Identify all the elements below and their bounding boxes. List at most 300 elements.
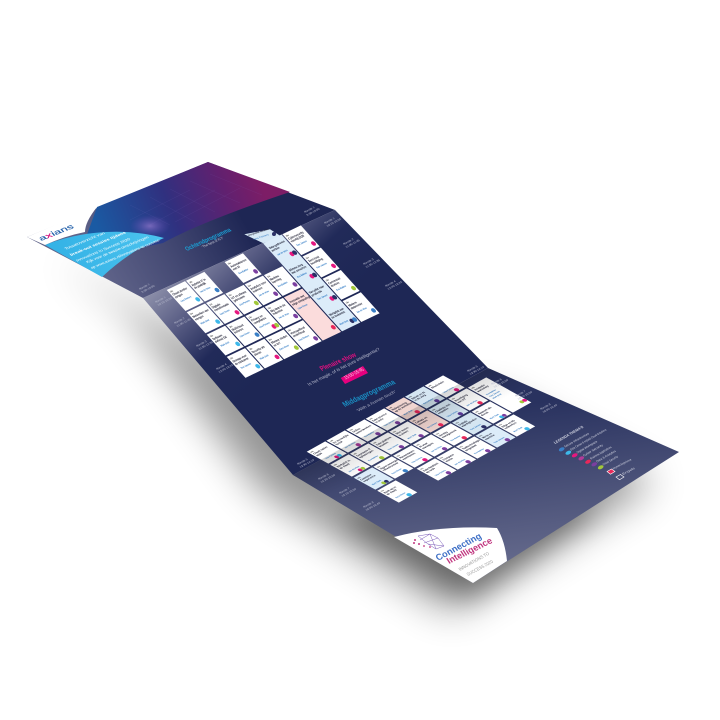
heading: middagprogramma: Middagprogramma bbox=[341, 378, 397, 408]
session r2 c6 bbox=[322, 270, 360, 300]
session r1 c4: Eva Bakker bbox=[278, 282, 289, 288]
session r0 c6 bbox=[282, 225, 320, 255]
row labels: middag left: Ronde 7 bbox=[338, 486, 351, 495]
session r2 c3 bbox=[265, 298, 302, 328]
session r3 c3: Lisa Peeters bbox=[298, 334, 311, 342]
session r1 c4: 15u bbox=[412, 419, 418, 422]
heading: ochtendprogramma: 'The best of ICT' bbox=[201, 236, 225, 249]
session r3 c2: 13u bbox=[268, 338, 273, 342]
session r2 c4: Eva Bakker bbox=[450, 435, 462, 442]
session column highlighted blue: Werkplek van bbox=[328, 307, 345, 317]
session r0 c5: Ethiek en AI bbox=[410, 391, 427, 400]
session r2 c5 bbox=[452, 412, 492, 435]
session r2 c0: Customer bbox=[359, 473, 374, 481]
row labels: ochtend left: Ronde 3 bbox=[195, 339, 208, 348]
session r2 c2: compliance bbox=[252, 316, 268, 325]
session r0 c2: 14u bbox=[349, 428, 355, 431]
row labels: ochtend left: 12:45-13:25 bbox=[218, 363, 234, 374]
session r2 c3: AI voor bbox=[418, 441, 430, 448]
row labels: ochtend right: Ronde 1 bbox=[323, 216, 336, 225]
session r1 c3: iedereen bbox=[251, 286, 264, 294]
session r3 c4: Taaltechnologie bbox=[461, 438, 482, 450]
session r0 c5: 14u bbox=[408, 395, 414, 398]
intro text bbox=[64, 231, 161, 270]
session column highlighted blue: Mark Smit bbox=[339, 319, 349, 326]
session r0 c1 bbox=[326, 430, 367, 453]
heading: ochtendprogramma bbox=[184, 227, 233, 252]
logo wordmark: SUCCESS 2020 bbox=[466, 559, 495, 578]
session r1 c1: Duurzame IT bbox=[355, 447, 372, 457]
session r2 c0: Mark Smit bbox=[371, 479, 382, 486]
session r1 c6 bbox=[448, 388, 488, 411]
session r1 c1: transformatie bbox=[213, 302, 230, 312]
session r1 c0: Jan de Vries bbox=[348, 465, 361, 473]
session r3 c0: 17u bbox=[381, 489, 386, 492]
session r3 c0: Tom Jansen bbox=[241, 363, 253, 370]
session r0 c4: op de werkvloer bbox=[393, 401, 415, 413]
session r2 c1: Hyperconverged bbox=[378, 458, 400, 470]
row labels: middag left: 13:30-14:10 bbox=[299, 458, 315, 469]
session r2 c0: Software bbox=[211, 333, 224, 341]
legend item: Data & Analytics bbox=[595, 449, 617, 463]
session column highlighted blue: Eva Bakker bbox=[297, 273, 308, 279]
session r1 c1: oplossingen bbox=[358, 449, 375, 459]
session r0 c2 bbox=[346, 419, 386, 442]
session r0 c1: de praktijk bbox=[193, 281, 207, 290]
session r2 c3: industrie bbox=[271, 308, 284, 316]
session r2 c6 bbox=[472, 401, 512, 424]
session r2 c6: Mark Smit bbox=[489, 413, 500, 420]
session r3 c4: toegepast bbox=[464, 444, 478, 452]
row labels: middag left: 14:20-15:00 bbox=[320, 473, 336, 484]
session r1 c6: van OT bbox=[456, 397, 467, 404]
session r1 c6: Zero trust bbox=[307, 255, 320, 263]
session r0 c0: 14u bbox=[309, 450, 315, 453]
session r3 c6: Modern bbox=[347, 300, 358, 308]
session r3 c2 bbox=[416, 458, 457, 481]
session r0 c3: met AI bbox=[231, 265, 241, 271]
logo wordmark bbox=[434, 531, 495, 578]
session r1 c1: 11u bbox=[209, 303, 214, 306]
session r2 c0 bbox=[354, 467, 394, 490]
session r2 c2: Privacy en bbox=[250, 314, 264, 323]
session r0 c6 bbox=[425, 375, 465, 398]
session r3 c0: de toekomst bbox=[234, 356, 250, 366]
session r0 c3: Automatiseren bbox=[229, 258, 248, 269]
session r1 c1 bbox=[350, 443, 390, 466]
session r1 c2: bouwen bbox=[377, 441, 390, 448]
row labels: middag left: Ronde 5 bbox=[296, 457, 309, 466]
legend item: Cloud Security bbox=[602, 455, 619, 466]
session r1 c6: 15u bbox=[452, 397, 457, 400]
row labels: ochtend left: 11:55-12:35 bbox=[198, 340, 214, 351]
session r0 c3: Tom Jansen bbox=[384, 420, 396, 427]
white logo corner bbox=[27, 207, 97, 245]
panel: top fold bbox=[27, 162, 335, 298]
schedule: ochtend sessies bbox=[167, 225, 380, 378]
session column highlighted blue: Slimme zorg bbox=[288, 263, 304, 272]
session r3 c2: Sara Visser bbox=[279, 345, 290, 351]
session r2 c6: 16u bbox=[475, 410, 480, 413]
session r3 c2: Lisa Peeters bbox=[434, 469, 448, 477]
row labels: ochtend right: Ronde 2 bbox=[342, 237, 355, 246]
session r2 c5: Digitale bbox=[457, 419, 469, 426]
session r0 c1: 10u bbox=[189, 281, 194, 284]
session r2 c1 bbox=[226, 316, 263, 346]
session r1 c1: Eva Bakker bbox=[367, 455, 380, 462]
session column highlighted blue bbox=[263, 235, 360, 331]
session r2 c6: Eva Bakker bbox=[336, 286, 347, 292]
session r3 c2 bbox=[265, 329, 302, 359]
session r1-r2 c7 bbox=[468, 377, 531, 413]
legend item: Data Center & Hybrid Cloud Solutions bbox=[569, 428, 608, 451]
row labels: ochtend left: Ronde 1 bbox=[138, 282, 151, 291]
session r0 c2: samenwerken bbox=[354, 424, 373, 435]
session r3 c6: Mark Smit bbox=[512, 426, 524, 433]
session r0 c2: Online bbox=[351, 427, 362, 433]
session r2 c1: Sara Visser bbox=[391, 468, 403, 475]
session r1 c5: empathie bbox=[436, 407, 450, 415]
session r1 c1: 15u bbox=[353, 452, 359, 455]
session column highlighted blue: productie bbox=[310, 289, 323, 297]
session r1 c2 bbox=[225, 285, 262, 315]
session column highlighted pink: Sara Visser bbox=[298, 304, 309, 310]
session r3 c6: netwerken bbox=[503, 421, 518, 430]
row labels: ochtend right bbox=[303, 204, 403, 291]
session r2 c0: experience bbox=[361, 474, 377, 483]
session r1 c3: is weten bbox=[397, 430, 410, 437]
session r2 c2: 12u bbox=[248, 316, 253, 319]
session r1 c4: mensen bbox=[417, 419, 429, 426]
session r2 c2: Lisa Peeters bbox=[258, 321, 271, 329]
panel: middle fold bbox=[143, 210, 488, 475]
session r0 c1: Jan de Vries bbox=[200, 287, 212, 294]
row labels: middag left bbox=[296, 455, 381, 512]
row labels: ochtend left: Ronde 1 bbox=[154, 295, 167, 304]
session r1 c1: Digitale bbox=[210, 302, 222, 310]
session r1 c2: 11u bbox=[228, 294, 233, 297]
row labels: ochtend left: 11:05-11:45 bbox=[176, 317, 192, 328]
session r1 c2: Tom Jansen bbox=[388, 444, 400, 451]
session r1 c3 bbox=[389, 421, 429, 444]
row labels: ochtend right: Ronde 3 bbox=[362, 257, 375, 266]
session r3 c2: 17u bbox=[420, 467, 425, 470]
session r1 c4 bbox=[409, 410, 449, 433]
white logo corner: connecting intelligence bbox=[394, 527, 507, 583]
intro text: Innovations to Success 2020 bbox=[75, 237, 131, 262]
session r2 c2 bbox=[245, 307, 282, 337]
row labels: middag right: Ronde 8 bbox=[539, 402, 552, 411]
session r2 c6: 12u bbox=[326, 279, 330, 282]
session r1-r2 c7: Mark Smit bbox=[492, 393, 503, 399]
session r1 c2: 15u bbox=[373, 441, 378, 444]
session column highlighted blue: met sensoren bbox=[290, 265, 308, 275]
session r1 c6: beveiliging bbox=[309, 257, 324, 266]
session r3 c4: Eva Bakker bbox=[473, 448, 486, 455]
icon: neural network bbox=[413, 534, 444, 549]
flap of the highlighted session bbox=[244, 227, 282, 243]
session r0 c4 bbox=[385, 397, 426, 420]
session r1 c6: Tom Jansen bbox=[316, 263, 328, 269]
row labels: middag right: Ronde 5 bbox=[466, 364, 479, 373]
session r3 c1 bbox=[246, 339, 283, 369]
session r2 c2 bbox=[393, 445, 433, 468]
session r0 c5 bbox=[405, 386, 445, 409]
session r1 c2: IoT en slimme bbox=[230, 290, 248, 300]
session r3 c1: Security als bbox=[250, 345, 266, 354]
legend bbox=[553, 424, 636, 480]
session r0 c2: Eva Bakker bbox=[363, 431, 376, 438]
session r1 c3: 11u bbox=[248, 285, 252, 288]
session r1 c5: Chatbots met bbox=[433, 403, 452, 413]
session column highlighted blue: Tom Jansen bbox=[317, 294, 329, 301]
session r2 c3: Jan de Vries bbox=[430, 445, 444, 453]
session r1 c4: Sara Visser bbox=[426, 422, 439, 429]
session r2 c4: management bbox=[440, 429, 458, 439]
session r0 c0: Lisa Peeters bbox=[324, 452, 338, 460]
session r2 c3: 12u bbox=[268, 307, 273, 310]
session r3 c6: 17u bbox=[499, 423, 504, 426]
session r2 c6: dienst bbox=[479, 411, 490, 417]
session r1 c0: 15u bbox=[334, 463, 339, 466]
session r1-r2 c7: Eva Bakker bbox=[485, 389, 497, 396]
session r0 c6: Tom Jansen bbox=[296, 240, 308, 247]
session r1 c0: de cloud bbox=[338, 462, 351, 470]
session r3 c1: Mark Smit bbox=[259, 354, 270, 361]
session column highlighted blue: Jan de Vries bbox=[277, 250, 289, 256]
session r0 c0: apps bbox=[314, 452, 324, 457]
session r3 c0: Storage voor bbox=[231, 353, 248, 363]
session r0 c6: 14u bbox=[427, 384, 433, 387]
legend item: Digital Workspace bbox=[576, 440, 598, 454]
row labels: middag left: Ronde 8 bbox=[362, 500, 375, 509]
session r3 c4 bbox=[456, 436, 496, 459]
header image bbox=[85, 162, 290, 250]
session r1 c6: Jan de Vries bbox=[465, 399, 479, 407]
session r1 c3: Jan de Vries bbox=[259, 291, 271, 297]
session r0 c3 bbox=[366, 408, 406, 431]
row labels: ochtend right: 10:15-10:55 bbox=[326, 217, 342, 228]
session r2 c4: Identity bbox=[437, 430, 449, 437]
row labels: ochtend left: 10:15-10:55 bbox=[157, 296, 173, 307]
row labels: ochtend right: 11:05-11:45 bbox=[345, 238, 361, 249]
session r1 c4: 11u bbox=[267, 275, 272, 279]
session r2 c6: devices bbox=[329, 281, 341, 288]
session r2 c5: 16u bbox=[455, 421, 461, 424]
session r1 c4 bbox=[264, 266, 301, 296]
session r0 c3 bbox=[225, 253, 262, 283]
row labels: middag left: 15:10-15:50 bbox=[341, 487, 357, 498]
session r0 c6: Cybersecurity bbox=[287, 230, 305, 241]
row labels: middag right: 15:10-15:50 bbox=[517, 390, 533, 401]
legend title: LEGENDA THEMA'S bbox=[553, 424, 585, 445]
session r1 c1 bbox=[206, 294, 243, 324]
session r0 c5: Sara Visser bbox=[422, 398, 435, 405]
session r1 c6: 11u bbox=[306, 257, 310, 260]
session r3 c0 bbox=[377, 480, 418, 503]
session r0 c0: Lisa Peeters bbox=[180, 295, 193, 303]
session r2 c1: Sara Visser bbox=[240, 332, 251, 338]
row labels: ochtend right: Ronde 1 bbox=[303, 205, 316, 214]
session r1-r2 c7: Tom Jansen bbox=[489, 391, 502, 398]
session r3 c3: 17u bbox=[440, 456, 445, 459]
session column highlighted blue: Data gedreven bbox=[268, 239, 286, 250]
subtitle: Is het magie, of is het pure intelligentie? bbox=[307, 347, 382, 387]
session r3 c5: 17u bbox=[479, 434, 484, 437]
heading: plenaire show: Plenaire show bbox=[318, 351, 359, 372]
session r3 c0: Back-up in bbox=[382, 486, 398, 494]
session r3 c0 bbox=[227, 348, 264, 378]
session r3 c5: Tom Jansen bbox=[494, 437, 506, 444]
session r0 c1: Jan de Vries bbox=[344, 441, 357, 449]
session r0 c3: 14u bbox=[368, 417, 374, 420]
session r0 c1: De menselijke bbox=[331, 434, 350, 444]
session column highlighted pink: Innovatie met bbox=[288, 294, 306, 304]
drop shadow under the folder bbox=[55, 258, 655, 612]
logo wordmark: INNOVATIONS TO bbox=[458, 551, 491, 573]
session r0 c0 bbox=[167, 281, 204, 311]
legend item: Engels bbox=[621, 466, 636, 476]
session r1 c2: Data platform bbox=[374, 436, 393, 446]
session r3 c4: 17u bbox=[459, 445, 465, 448]
row labels: middag left: Ronde 6 bbox=[317, 472, 330, 481]
schedule: middag sessies bbox=[307, 364, 555, 503]
session r2 c4: 16u bbox=[436, 432, 441, 435]
session r3 c3: Computer bbox=[441, 453, 456, 461]
session r1-r2 c7: workshop bbox=[475, 385, 490, 393]
session column highlighted blue: de toekomst bbox=[330, 310, 346, 320]
row labels: middag right: 13:30-14:10 bbox=[469, 365, 485, 376]
session r1 c2: Lisa Peeters bbox=[238, 299, 251, 307]
session r1 c0: Netwerken van bbox=[191, 308, 210, 319]
session r2 c1: infrastructuur bbox=[381, 461, 400, 472]
row labels: ochtend right: Ronde 4 bbox=[384, 279, 397, 288]
intro text: Totaaloverzicht van bbox=[64, 231, 106, 251]
session r3 c0: 13u bbox=[230, 357, 235, 360]
session r0 c5: in de zorg bbox=[413, 394, 427, 402]
session r0 c4: 14u bbox=[388, 406, 394, 409]
session column highlighted pink bbox=[284, 289, 341, 341]
session r2 c2: voorkomen bbox=[401, 452, 417, 461]
legend item: Business Applications bbox=[589, 445, 613, 460]
session r1-r2 c7: Innovatie bbox=[473, 383, 487, 391]
session r1 c2: gebouwen bbox=[232, 294, 246, 303]
session r3 c6: 13u bbox=[346, 301, 350, 305]
session r1 c0 bbox=[187, 303, 224, 333]
session r0 c3: in actie bbox=[373, 417, 385, 424]
session r0 c1 bbox=[186, 272, 223, 302]
session r1 c3 bbox=[245, 276, 282, 305]
session r3 c5 bbox=[475, 425, 516, 448]
session r0 c1: Hybride IT in bbox=[190, 277, 207, 287]
session r1 c4: Cobots en bbox=[414, 416, 429, 424]
session r2 c0: 16u bbox=[357, 476, 362, 479]
session r0 c4: Robotisering bbox=[390, 401, 408, 411]
session r1 c5 bbox=[428, 399, 469, 422]
session r3 c3: Voorspellend bbox=[289, 325, 306, 336]
heading: middagprogramma: 'With a human touch' bbox=[356, 389, 397, 413]
session r1 c2 bbox=[370, 432, 410, 455]
session r2 c2: Lisa Peeters bbox=[410, 456, 424, 464]
session r0 c0: Cloud native bbox=[312, 445, 329, 455]
cyan intro block bbox=[45, 231, 164, 277]
session r3 c3: Jan de Vries bbox=[453, 458, 467, 466]
session r3 c2: Slimme steden bbox=[270, 334, 289, 345]
session r3 c0: de cloud bbox=[385, 488, 398, 496]
session r1 c4: learning bbox=[271, 277, 283, 284]
logo wordmark: Connecting bbox=[434, 531, 483, 563]
session r0 c6: 10u bbox=[286, 234, 290, 238]
session r1 c1: Sara Visser bbox=[220, 310, 231, 316]
session r2 c1: Multicloud bbox=[230, 323, 245, 332]
session column highlighted pink: edge computing bbox=[291, 295, 311, 307]
session r2 c4 bbox=[432, 423, 473, 446]
session r2 c6: Connected bbox=[327, 276, 342, 285]
session r3 c6: Jan de Vries bbox=[356, 307, 369, 314]
session r0 c1: factor bbox=[334, 440, 345, 446]
session r0 c3: Eva Bakker bbox=[239, 269, 249, 275]
session r3 c2: en IoT bbox=[272, 341, 282, 348]
session r1 c3: 15u bbox=[393, 430, 398, 433]
legend item: Cyber Security bbox=[582, 443, 604, 457]
session r2 c1: 12u bbox=[229, 325, 234, 329]
session r2 c3: Jan de Vries bbox=[279, 313, 291, 320]
row labels: middag left: 16:00-16:40 bbox=[365, 501, 381, 512]
heading: ochtendprogramma: Ochtendprogramma bbox=[184, 227, 233, 252]
session r3 c3: vision bbox=[444, 457, 454, 463]
session r1 c0 bbox=[330, 454, 370, 477]
intro text: op www.axians.nl/innovations-to-success bbox=[90, 239, 161, 270]
session r2 c2: Ransomware bbox=[398, 449, 416, 459]
heading: plenaire show bbox=[307, 347, 382, 387]
flap of the highlighted session: Keynote sessie bbox=[247, 227, 270, 237]
session r2 c3: managers bbox=[420, 442, 435, 450]
row labels: middag right: Ronde 6 bbox=[490, 377, 503, 386]
session r2 c1 bbox=[373, 456, 414, 479]
session r2 c2: 16u bbox=[397, 454, 402, 457]
session r1 c0: Werkplek in bbox=[335, 459, 352, 468]
session r2 c3 bbox=[413, 434, 453, 457]
session r0 c0: Cloud zonder bbox=[171, 286, 189, 297]
session r3 c3: 13u bbox=[288, 329, 293, 332]
session r2 c3: Big data in de bbox=[269, 303, 287, 313]
session r3 c0: Sara Visser bbox=[395, 492, 407, 499]
session r2 c0: Mark Smit bbox=[220, 341, 231, 348]
session r3 c6 bbox=[495, 414, 535, 437]
session r1 c6: Beveiliging bbox=[453, 393, 469, 402]
session r1 c5: 15u bbox=[432, 408, 437, 411]
session r3 c5: Mens en bbox=[480, 432, 493, 439]
session r2 c1: beheren bbox=[233, 327, 245, 335]
session r2 c3: 16u bbox=[416, 443, 421, 446]
session column highlighted blue: werken bbox=[269, 246, 281, 253]
session r0 c0: 10u bbox=[170, 290, 175, 293]
session r2 c1: 16u bbox=[377, 465, 382, 468]
row labels: middag right: Ronde 7 bbox=[514, 389, 527, 398]
session r1 c0: 11u bbox=[190, 313, 195, 316]
session r3 c6: Edge en 5G bbox=[500, 419, 517, 428]
session r0 c6: Lisa Peeters bbox=[442, 386, 456, 394]
intro text: Kijk voor de sessie-omschrijvingen bbox=[85, 236, 150, 264]
session r1 c5: Lisa Peeters bbox=[446, 410, 460, 418]
session r0 c6: voorbij 2020 bbox=[289, 234, 306, 243]
session r1 c0: Mark Smit bbox=[200, 319, 211, 325]
session r1 c0: morgen bbox=[194, 314, 205, 322]
session r3 c1: dienst bbox=[253, 350, 262, 357]
session r2 c0 bbox=[207, 326, 244, 356]
row labels: ochtend right: 11:55-12:35 bbox=[365, 258, 381, 269]
logo wordmark: Intelligence bbox=[445, 536, 494, 566]
